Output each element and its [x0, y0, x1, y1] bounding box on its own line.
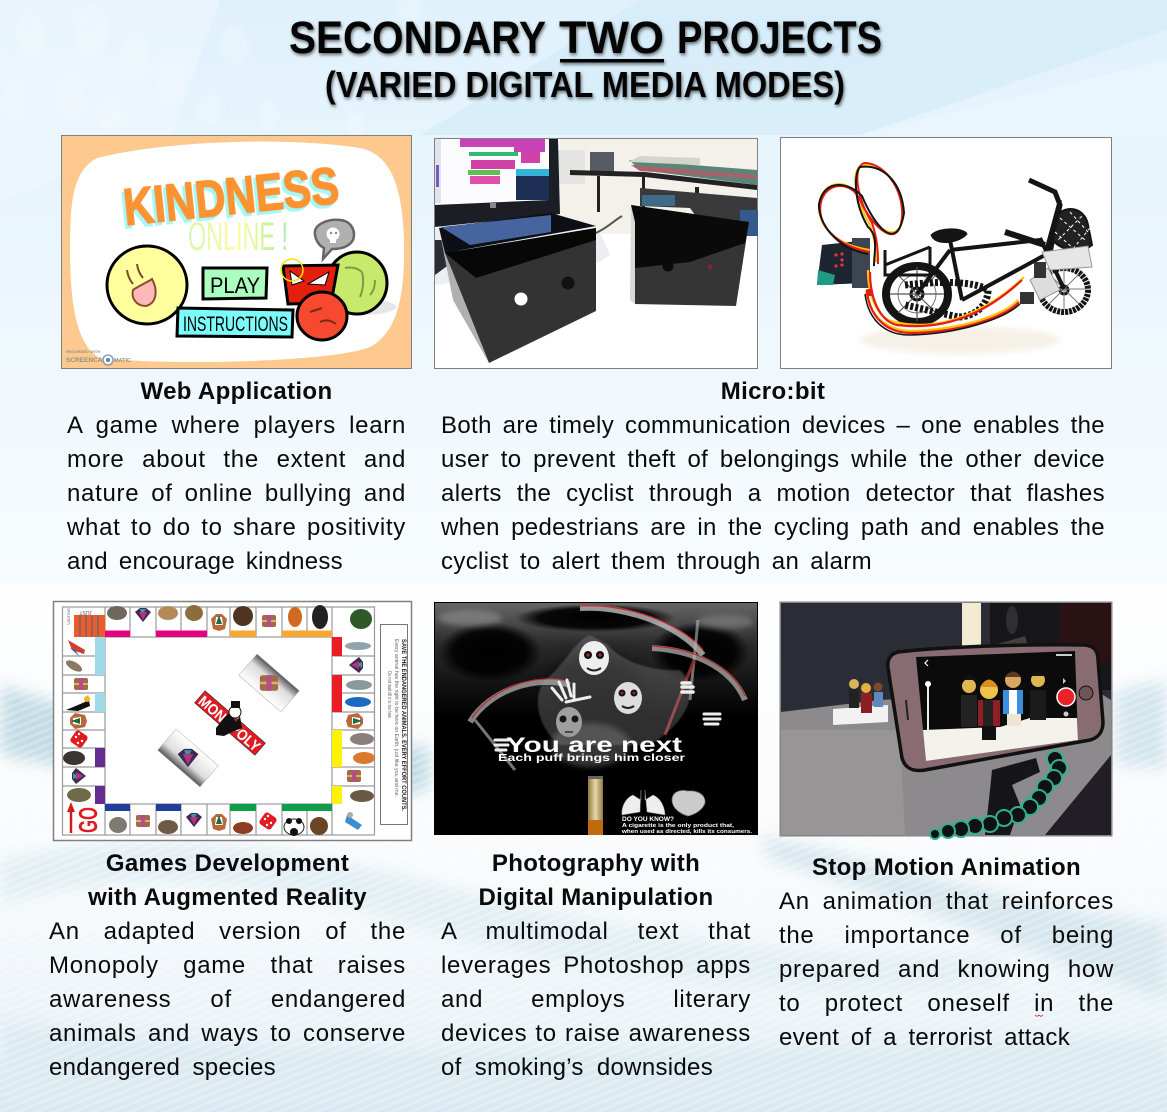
front black box: [439, 213, 596, 363]
white sensor boards: [1020, 246, 1092, 304]
heading: photography: Digital Manipulation: [478, 884, 714, 911]
rear rack: [885, 247, 930, 275]
phone earpiece: [906, 700, 908, 720]
red led: [866, 289, 873, 296]
white game screen: [70, 142, 404, 362]
side instruction panel: Do not wait till it is too late.: [386, 671, 392, 719]
right column icons: [345, 642, 375, 802]
frame: [917, 200, 1064, 300]
description: photography: leverages Photoshop apps: [441, 952, 751, 979]
description: micro:bit: [441, 412, 1105, 575]
description: games development: [49, 918, 406, 1081]
flexible tripod legs: [930, 751, 1067, 839]
text block: photography: [441, 850, 751, 1081]
rear black box: [630, 205, 749, 306]
phone screen: [916, 651, 1078, 761]
heading: web application: Web Application: [141, 378, 332, 405]
description: stop motion: An animation that reinforces: [779, 888, 1114, 915]
description: games development: animals and ways to conserve: [49, 1020, 406, 1047]
screencast watermark: SCREENCAST: [66, 357, 111, 364]
yellow smiling character: [107, 246, 187, 324]
text block: stop motion: [779, 854, 1114, 1051]
seat: [931, 229, 967, 242]
poster headline: Each puff brings him closer: [498, 752, 685, 764]
did you know note: DO YOU KNOW?: [622, 817, 674, 823]
play button: [203, 268, 267, 299]
description: web application: what to do to share positivity: [67, 514, 406, 541]
board grid: [62, 607, 375, 835]
online text: ONLINE !: [188, 215, 288, 259]
smartphone: [888, 645, 1103, 770]
skeletal hands: [495, 680, 720, 750]
camera interface controls: [925, 654, 1093, 734]
description: photography: A multimodal text that: [441, 918, 751, 945]
description: stop motion: the importance of being: [779, 922, 1114, 949]
poster headline: [498, 734, 685, 764]
description: photography: devices to raise awareness: [441, 1020, 751, 1047]
panel: stop motion photo: [780, 602, 1112, 839]
skull reaper three: [556, 707, 582, 737]
description: games development: endangered species: [49, 1054, 276, 1081]
title: TWO: [559, 12, 664, 63]
basket: [1053, 209, 1092, 250]
description: web application: [67, 412, 406, 575]
spell-check squiggle: [1035, 1015, 1043, 1016]
front wheel: [1040, 268, 1088, 312]
background lego figures on base: [833, 679, 888, 725]
screencast watermark: MATIC: [114, 358, 131, 364]
table shadow: [860, 326, 1060, 354]
tripod clamp: [965, 606, 1060, 835]
description: photography: and employs literary: [441, 986, 751, 1013]
description: stop motion: [779, 888, 1114, 1051]
description: web application: more about the extent and: [67, 446, 406, 473]
computer monitor: [435, 139, 560, 227]
table edge: [1045, 755, 1111, 835]
play button: PLAY: [210, 273, 260, 298]
text block: web application: [67, 378, 406, 575]
go corner: [67, 802, 103, 833]
description: micro:bit: alerts the cyclist through a motion detector that flashes: [441, 480, 1105, 507]
text block: games development: [49, 850, 406, 1081]
description: web application: A game where players learn: [67, 412, 406, 439]
reaper hoods: [538, 635, 690, 745]
skull reaper two: [614, 682, 642, 714]
room background: [555, 139, 758, 236]
description: web application: and encourage kindness: [67, 548, 343, 575]
cable between boxes: [596, 216, 622, 233]
did you know note: [621, 817, 752, 835]
title: SECONDARY: [289, 12, 546, 63]
smoke background: [435, 603, 757, 718]
title: [289, 12, 882, 105]
poster smoke: [550, 723, 630, 767]
keyboard and laptop: [435, 228, 610, 285]
description: photography: of smoking’s downsides: [441, 1054, 713, 1081]
description: stop motion: prepared and knowing how: [779, 956, 1114, 983]
side instruction panel: [380, 624, 408, 824]
poster headline: You are next: [506, 734, 682, 757]
heading: photography: Photography with: [492, 850, 700, 877]
rear wheel: [886, 266, 948, 322]
screencast watermark: RECORDED WITH: [66, 349, 100, 354]
heading: games development: [88, 850, 367, 911]
lungs and heart: [622, 790, 705, 816]
skull reaper one: [579, 641, 609, 675]
side instruction panel: Every animal has the right to be here on Earth, just like you and me.: [393, 639, 399, 797]
description: web application: nature of online bullying and: [67, 480, 406, 507]
description: micro:bit: user to prevent theft of belongings while the other device: [441, 446, 1105, 473]
chain: [905, 282, 988, 317]
side instruction panel: SAVE THE ENDANGERED ANIMALS. EVERY EFFORT COUNTS.: [400, 639, 407, 811]
heading: photography: [478, 850, 714, 911]
lego base on screen: [923, 718, 1078, 761]
red angry square character: [281, 259, 338, 304]
panel: micro:bit bicycle photo: [780, 138, 1112, 368]
chance and chest cards: [239, 654, 299, 712]
description: micro:bit: when pedestrians are in the cycling path and enables the: [441, 514, 1105, 541]
speech bubble with skull: [315, 220, 354, 259]
jail corner: [66, 608, 105, 637]
panel: micro:bit anti-theft boxes photo: [434, 138, 758, 368]
jail corner: JUST: [80, 609, 92, 615]
instructions button: [177, 308, 293, 337]
property colour bars: [95, 630, 342, 811]
green character: [327, 252, 396, 315]
scythes: [470, 606, 745, 770]
description: games development: An adapted version of the: [49, 918, 406, 945]
cigarette: [588, 776, 603, 835]
heading: games development: with Augmented Reality: [88, 884, 367, 911]
description: micro:bit: cyclist to alert them through an alarm: [441, 548, 872, 575]
instructions button: INSTRUCTIONS: [183, 313, 288, 336]
heading: games development: Games Development: [106, 850, 349, 877]
panel: monopoly board: [54, 602, 412, 840]
description: micro:bit: Both are timely communication devices – one enables the: [441, 412, 1105, 439]
text block: micro:bit: [441, 378, 1105, 575]
red round character: [297, 292, 347, 340]
panel: smoking poster: [434, 602, 758, 835]
did you know note: when used as directed, kills its consumers.: [621, 829, 752, 835]
dark wall: [781, 603, 1111, 712]
heading: stop motion: Stop Motion Animation: [812, 854, 1081, 881]
description: stop motion: event of a terrorist attack: [779, 1024, 1070, 1051]
description: games development: Monopoly game that raises: [49, 952, 406, 979]
description: photography: [441, 918, 751, 1081]
handlebars: [1029, 180, 1060, 262]
panel: web application screenshot: [62, 136, 412, 368]
description: stop motion: to protect oneself in the: [779, 990, 1114, 1017]
floor highlight: [781, 730, 905, 835]
top row icons: [107, 605, 372, 631]
bicycle: [885, 180, 1092, 322]
go corner: GO: [73, 807, 103, 833]
heading: micro:bit: Micro:bit: [721, 378, 825, 405]
connecting wires: [819, 163, 1024, 335]
game title kindness: KINDNESS: [121, 157, 342, 237]
lego characters on screen: [961, 672, 1046, 740]
jail corner: VISITING: [66, 608, 71, 625]
bottom row icons: [109, 811, 362, 836]
monopoly logo banner: MONOPOLY: [195, 693, 263, 755]
title: (VARIED DIGITAL MEDIA MODES): [325, 64, 845, 105]
title: PROJECTS: [677, 12, 882, 63]
light sensor holes: [514, 292, 528, 306]
left column icons: [63, 640, 91, 802]
screencast watermark: [66, 349, 131, 365]
description: games development: awareness of endangered: [49, 986, 406, 1013]
micro:bit board: [817, 238, 870, 288]
did you know note: A cigarette is the only product that,: [622, 823, 735, 829]
